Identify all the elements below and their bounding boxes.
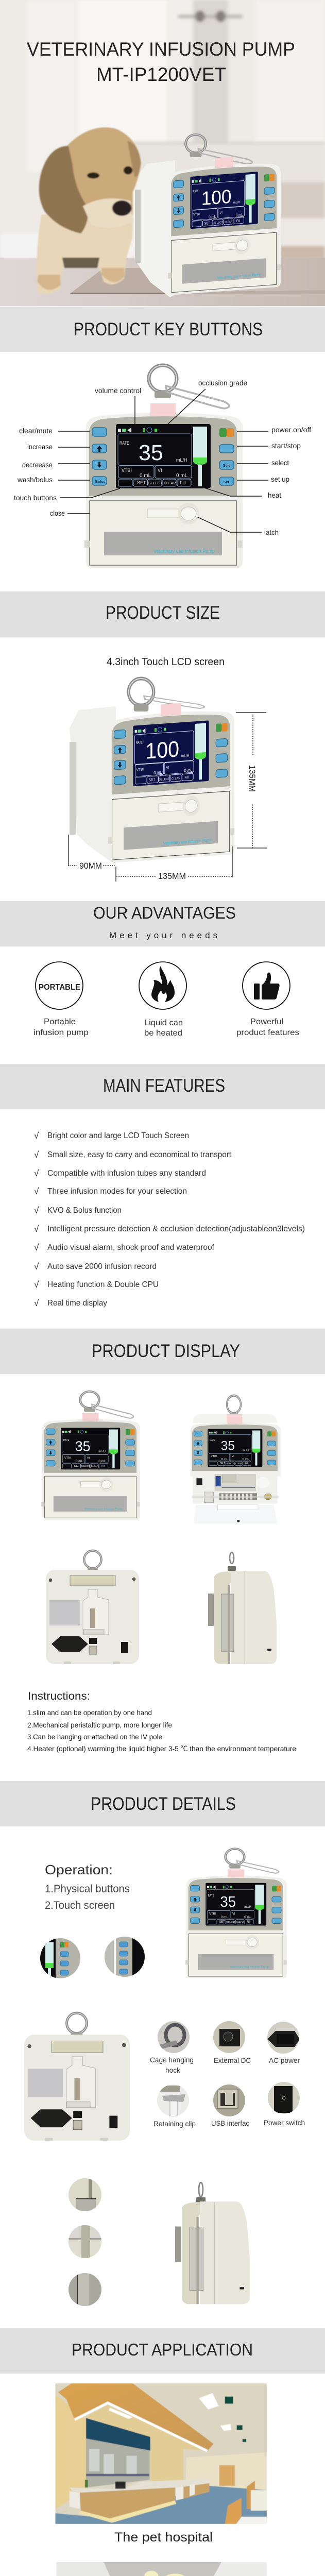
- annotated pump front view: RATE: [119, 440, 129, 446]
- feature checklist: Bright color and large LCD Touch Screen: [47, 1131, 189, 1140]
- pump side view: [208, 1552, 277, 1664]
- annotated pump front view: 35: [139, 440, 163, 465]
- pump size view: 0 mL: [184, 768, 193, 773]
- detail oval: middle joint: [69, 2225, 101, 2259]
- hero pump body: Veterinary use Infusion Pump: [217, 273, 261, 280]
- detail captions top row: AC power: [269, 2056, 300, 2064]
- dimension lines: [69, 713, 267, 882]
- feature checklist: Small size, easy to carry and economical to transport: [47, 1150, 232, 1159]
- section band: our advantages: OUR ADVANTAGES: [93, 904, 236, 922]
- advantage captions: infusion pump: [33, 1028, 89, 1037]
- pump front closed: mL/H: [98, 1450, 106, 1453]
- pump front open door: 0 mL: [221, 1458, 228, 1461]
- pump front closed: Veterinary use Infusion Pump: [84, 1508, 123, 1511]
- hero pump body: 0 mL: [236, 213, 243, 217]
- advantage captions: be heated: [144, 1029, 182, 1038]
- section band: product display: PRODUCT DISPLAY: [92, 1341, 240, 1361]
- hero pump body: VTBI: [193, 212, 200, 217]
- key button callouts: close: [50, 509, 65, 517]
- pump front closed: 0 mL: [98, 1460, 106, 1463]
- section band: product details: [0, 1781, 325, 1826]
- feature checklist: √: [34, 1150, 39, 1160]
- pump size view: SET: [149, 778, 156, 783]
- detail icon: cage hanging hock: [157, 2021, 190, 2054]
- annotated pump front view: Veterinary use Infusion Pump: [153, 549, 215, 554]
- pump size view: Fill: [184, 776, 189, 780]
- operation text: 2.Touch screen: [45, 1900, 115, 1911]
- section band: product key buttons: [0, 307, 325, 352]
- pump size view: SELECT: [159, 777, 169, 782]
- detail icon: USB interface: [213, 2084, 245, 2116]
- detail icon: power switch: [268, 2082, 300, 2114]
- pump size view: mL/H: [181, 754, 189, 758]
- pump front closed: [41, 1392, 140, 1520]
- advantage captions: Portable: [44, 1018, 76, 1026]
- detail pump front: VTBI: [209, 1912, 216, 1916]
- pump front closed: 0 mL: [76, 1460, 83, 1463]
- pump size view: 0 mL: [153, 770, 162, 775]
- feature checklist: √: [34, 1187, 39, 1196]
- feature checklist: Intelligent pressure detection & occlusion detection(adjustableon3levels): [47, 1225, 305, 1233]
- detail pump front: SELECT: [227, 1921, 235, 1923]
- detail captions bottom row: Retaining clip: [153, 2120, 196, 2128]
- hero pump body: Fill: [236, 219, 240, 223]
- annotated pump front view: 0 mL: [140, 473, 151, 479]
- pump size view: [70, 679, 234, 866]
- pump front open door: mL/H: [243, 1449, 249, 1452]
- instructions: 2.Mechanical peristaltic pump, more longer life: [27, 1721, 172, 1729]
- pump front open door: VTBI: [211, 1455, 217, 1458]
- detail pump front: VI: [232, 1912, 235, 1916]
- feature checklist: √: [34, 1168, 39, 1178]
- photo: pet clinic: [56, 2562, 267, 2576]
- pump size view: VTBI: [136, 768, 144, 772]
- annotated pump front view: mL/H: [176, 457, 187, 463]
- pump front closed: RATE: [63, 1439, 70, 1442]
- dimension lines: 90MM: [79, 861, 102, 871]
- section band: product size: [0, 591, 325, 637]
- detail icon: retaining clip: [157, 2084, 189, 2116]
- feature checklist: Audio visual alarm, shock proof and waterproof: [47, 1243, 215, 1252]
- pump front open door: CLEAR: [235, 1462, 242, 1465]
- instructions: 4.Heater (optional) warming the liquid higher 3-5 ℃ than the environment temperature: [27, 1744, 296, 1753]
- feature checklist: Compatible with infusion tubes any standard: [47, 1169, 206, 1178]
- feature checklist: √: [34, 1131, 39, 1141]
- icon: portable: [36, 962, 83, 1009]
- feature checklist: √: [34, 1280, 39, 1290]
- section band: main features: [0, 1064, 325, 1109]
- key button callouts: start/stop: [271, 442, 301, 450]
- detail pump back view: [24, 2013, 130, 2141]
- detail pump front: SET: [219, 1921, 225, 1924]
- detail icon: external DC: [213, 2021, 245, 2054]
- pump front open door: 35: [220, 1438, 235, 1453]
- instructions: 3.Can be hanging or attached on the IV pole: [27, 1733, 162, 1741]
- feature checklist: √: [34, 1243, 39, 1252]
- annotated pump front view: Set: [224, 481, 230, 484]
- annotated pump front view: VTBI: [122, 468, 132, 473]
- instructions: 1.slim and can be operation by one hand: [27, 1708, 152, 1717]
- hero pump body: SET: [204, 222, 210, 226]
- key button callouts: wash/bolus: [17, 476, 53, 484]
- section band: main features: MAIN FEATURES: [103, 1076, 225, 1096]
- hero puppy: [37, 127, 141, 294]
- screen size caption: 4.3inch Touch LCD screen: [107, 656, 225, 668]
- detail captions top row: [150, 2056, 300, 2074]
- hero title: [27, 39, 295, 85]
- operation text: Operation:: [45, 1862, 113, 1877]
- feature checklist: √: [34, 1262, 39, 1272]
- section band: product details: PRODUCT DETAILS: [91, 1794, 236, 1814]
- hero pump body: CLEAR: [225, 220, 233, 224]
- detail pump side view: [175, 2182, 250, 2304]
- key button callouts: volume control: [95, 386, 141, 395]
- hero pump body: mL/H: [233, 200, 241, 205]
- pump front open door: 0 mL: [243, 1458, 249, 1461]
- feature checklist: √: [34, 1206, 39, 1215]
- operation text: [45, 1862, 130, 1911]
- pump front closed: SELECT: [81, 1465, 90, 1467]
- hero pump body: RATE: [193, 189, 199, 194]
- key button callouts: [14, 379, 311, 536]
- key button callouts: heat: [268, 491, 281, 499]
- photo: pet hospital: [55, 2383, 267, 2524]
- pump front closed: Fill: [101, 1465, 105, 1468]
- pump size view: CLEAR: [172, 777, 180, 781]
- detail captions top row: Cage hanging: [150, 2056, 194, 2064]
- annotated pump front view: SET: [137, 480, 146, 485]
- feature checklist: √: [34, 1298, 39, 1308]
- pump front open door: VI: [232, 1455, 234, 1458]
- pump front closed: 35: [75, 1438, 91, 1454]
- icon: thumbs up: [243, 962, 290, 1009]
- key button callouts: occlusion grade: [198, 379, 247, 387]
- detail captions top row: External DC: [214, 2056, 251, 2064]
- advantage captions: Liquid can: [144, 1019, 183, 1027]
- detail pump front: Fill: [247, 1921, 250, 1924]
- caption: the pet hospital: The pet hospital: [114, 2530, 213, 2545]
- feature checklist: √: [34, 1224, 39, 1234]
- dimension lines: 135MM: [247, 765, 257, 792]
- annotated pump front view: VI: [158, 468, 162, 473]
- dimension lines: 135MM: [158, 871, 186, 881]
- detail oval: bottom rail: [69, 2273, 101, 2306]
- annotated pump front view: Bolus: [95, 480, 106, 484]
- key button callouts: select: [271, 459, 289, 467]
- pump front closed: VI: [87, 1456, 90, 1460]
- key button callouts: latch: [264, 528, 279, 536]
- section band: product application: PRODUCT APPLICATION: [72, 2340, 253, 2359]
- pump front closed: VTBI: [64, 1456, 71, 1460]
- pump size view: VI: [166, 766, 169, 770]
- annotated pump front view: Sele: [223, 464, 231, 468]
- instructions: [27, 1690, 296, 1753]
- pump front open door: Fill: [245, 1462, 248, 1465]
- key button callouts: increase: [27, 443, 53, 451]
- section band: product display: [0, 1329, 325, 1374]
- detail pump front: Veterinary use Infusion Pump: [230, 1966, 269, 1969]
- feature checklist: [34, 1131, 305, 1308]
- hero photo: veterinary pump with puppy: [0, 0, 325, 307]
- detail captions bottom row: Power switch: [264, 2119, 305, 2127]
- pump front open door: SET: [220, 1462, 226, 1465]
- feature checklist: Three infusion modes for your selection: [47, 1187, 187, 1196]
- detail pump front: mL/H: [244, 1906, 251, 1909]
- detail circle: right-side buttons: [40, 1937, 81, 1978]
- pump front closed: SET: [74, 1465, 80, 1468]
- icon: flame: [139, 962, 186, 1009]
- hero pump body: VI: [220, 211, 223, 215]
- key button callouts: decreease: [22, 461, 53, 469]
- section band: product key buttons: PRODUCT KEY BUTTONS: [74, 319, 263, 340]
- key button callouts: set up: [271, 475, 289, 483]
- hero pump body: 0 mL: [209, 215, 216, 219]
- detail pump front: RATE: [208, 1894, 214, 1897]
- instructions: Instructions:: [28, 1690, 90, 1702]
- detail pump front: 0 mL: [244, 1916, 252, 1919]
- hero pump body: 100: [201, 186, 231, 210]
- key button callouts: touch buttons: [14, 494, 57, 502]
- pump size view: 100: [145, 736, 179, 764]
- detail circle: left-side buttons: [105, 1936, 146, 1977]
- section band: product size: PRODUCT SIZE: [106, 603, 220, 623]
- section band: product application: [0, 2328, 325, 2374]
- feature checklist: Auto save 2000 infusion record: [47, 1262, 157, 1271]
- detail icon: AC power: [267, 2022, 300, 2054]
- key button callouts: clear/mute: [19, 427, 53, 435]
- pump size view: Veterinary use Infusion Pump: [163, 837, 213, 846]
- detail pump front: CLEAR: [236, 1921, 244, 1923]
- detail pump front: 35: [220, 1894, 236, 1910]
- detail captions bottom row: [153, 2119, 305, 2128]
- pump front open door: SELECT: [226, 1462, 235, 1465]
- advantage captions: [33, 1018, 299, 1038]
- hero title: MT-IP1200VET: [96, 64, 226, 85]
- detail oval: top joint: [69, 2178, 101, 2212]
- detail pump front: [185, 1849, 287, 1978]
- advantage captions: Powerful: [250, 1018, 283, 1026]
- annotated pump front view: 0 mL: [176, 473, 188, 479]
- advantage captions: product features: [236, 1028, 299, 1037]
- feature checklist: Heating function & Double CPU: [47, 1280, 159, 1289]
- section band: our advantages: Meet your needs: [109, 930, 217, 940]
- detail pump front: 0 mL: [221, 1916, 228, 1919]
- annotated pump front view: SELECT: [148, 482, 163, 485]
- hero pump body: [133, 134, 281, 297]
- annotated pump front view: CLEAR: [164, 482, 176, 485]
- annotated pump front view: Fill: [180, 480, 185, 485]
- pump front closed: CLEAR: [91, 1465, 98, 1467]
- annotated pump front view: [84, 365, 243, 568]
- feature checklist: Real time display: [47, 1299, 107, 1308]
- hero title: VETERINARY INFUSION PUMP: [27, 39, 295, 60]
- section band: our advantages: [0, 901, 325, 946]
- pump size view: RATE: [136, 741, 143, 745]
- feature checklist: KVO & Bolus function: [47, 1206, 122, 1215]
- key button callouts: power on/off: [271, 426, 311, 434]
- hero pump body: SELECT: [213, 221, 223, 225]
- detail captions bottom row: USB interfac: [211, 2119, 249, 2127]
- detail captions top row: hock: [165, 2066, 181, 2074]
- pump back view: [46, 1551, 139, 1664]
- pump front open door: [191, 1396, 281, 1523]
- operation text: 1.Physical buttons: [45, 1883, 130, 1895]
- pump front open door: RATE: [210, 1439, 215, 1442]
- icon: portable: PORTABLE: [39, 983, 80, 992]
